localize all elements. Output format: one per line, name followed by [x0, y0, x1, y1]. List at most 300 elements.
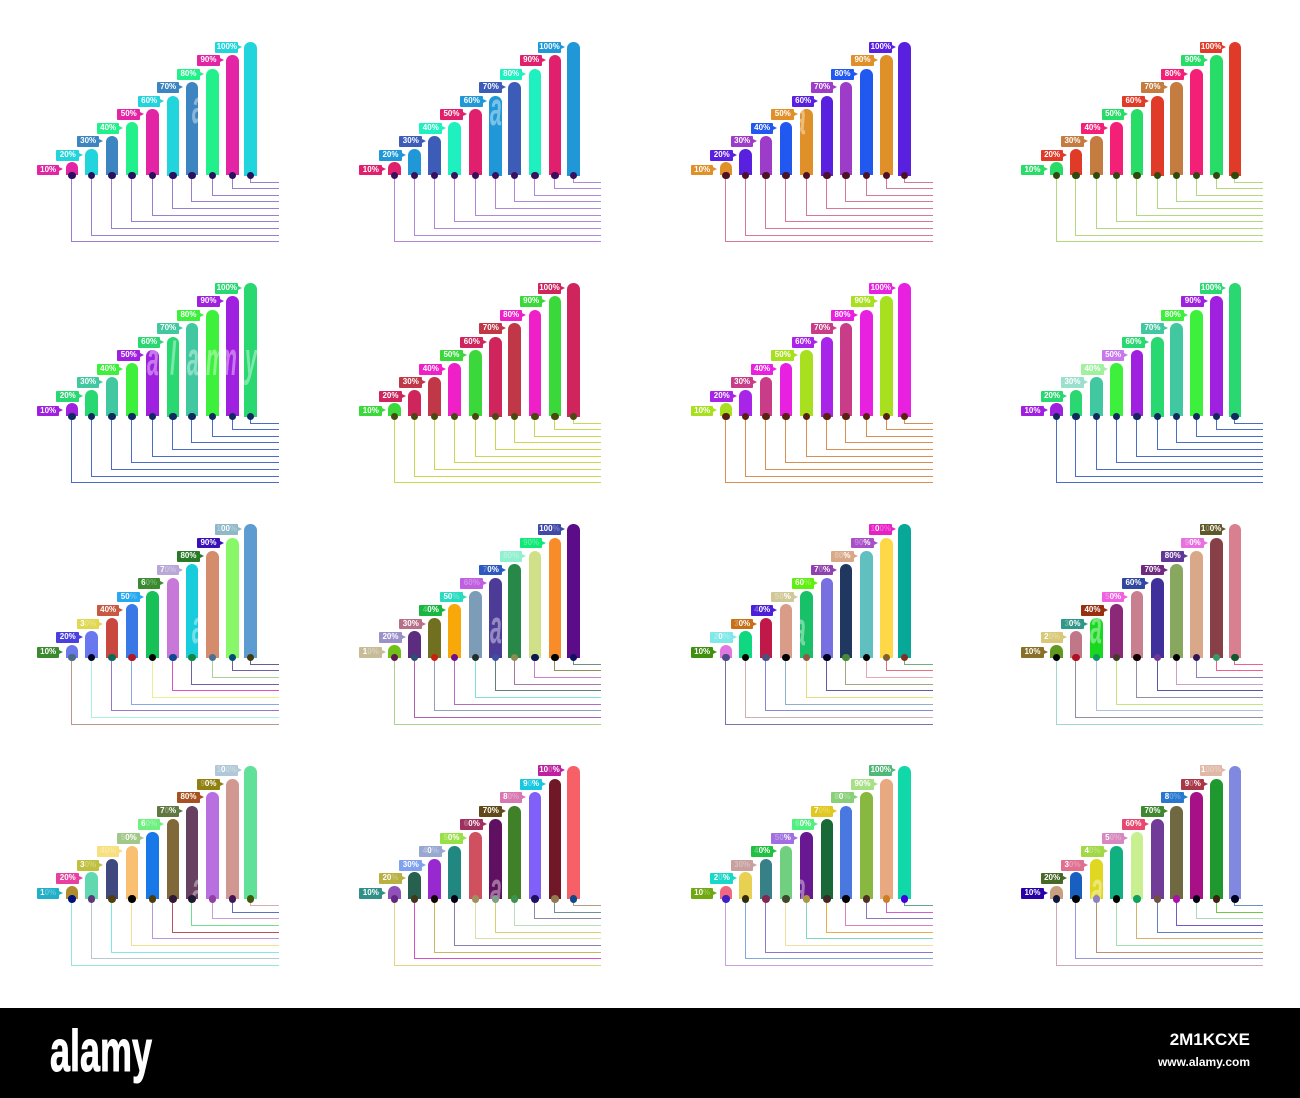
bar 10%: 10%	[694, 165, 710, 174]
bar 60%	[460, 578, 601, 691]
bar 30%: 30%	[1064, 619, 1080, 628]
bar 100%: 100%	[1201, 765, 1221, 774]
bar 10%: 10%	[363, 647, 379, 656]
bar 90%: 90%	[1185, 538, 1201, 547]
bar 60%	[1122, 578, 1263, 691]
bar 30%: 30%	[734, 377, 750, 386]
bar 80%	[500, 792, 601, 919]
bar 80%: 80%	[180, 310, 196, 319]
bar 40%: 40%	[754, 364, 770, 373]
bar 90%	[1181, 538, 1263, 671]
bar 100%	[1200, 283, 1263, 424]
bar 60%	[460, 819, 601, 933]
bar 40%	[419, 363, 601, 463]
bar 100%: 100%	[871, 765, 891, 774]
bar 40%	[97, 846, 279, 946]
bar 60%	[1122, 336, 1263, 450]
bar 70%	[1141, 323, 1263, 443]
bar 70%: 70%	[814, 82, 830, 91]
bar 60%: 60%	[464, 337, 480, 346]
bar 90%: 90%	[1185, 55, 1201, 64]
bar 20%: 20%	[382, 150, 398, 159]
bar 60%: 60%	[464, 96, 480, 105]
bar 10%	[359, 162, 601, 242]
bar 90%: 90%	[854, 296, 870, 305]
bar 70%: 70%	[814, 806, 830, 815]
bar 100%	[215, 524, 279, 665]
bar 90%	[197, 779, 279, 913]
bar 70%: 70%	[160, 82, 176, 91]
bar 20%	[1041, 149, 1263, 236]
bar 30%	[1061, 136, 1263, 229]
bar 100%	[1200, 524, 1263, 665]
bar 20%: 20%	[382, 632, 398, 641]
bar 10%: 10%	[363, 165, 379, 174]
bar 40%: 40%	[423, 846, 439, 855]
bar 30%: 30%	[80, 619, 96, 628]
bar 50%	[440, 350, 601, 457]
bar 80%: 80%	[503, 69, 519, 78]
bar 100%: 100%	[871, 283, 891, 292]
chart 2	[359, 42, 601, 242]
bar 10%	[37, 886, 279, 966]
bar 10%: 10%	[40, 406, 56, 415]
bar 60%	[138, 96, 279, 209]
bar 30%	[77, 377, 279, 470]
bar 20%: 20%	[714, 873, 730, 882]
bar 70%: 70%	[814, 565, 830, 574]
bar 90%	[197, 296, 279, 430]
website: www.alamy.com	[1158, 1055, 1250, 1069]
bar 70%: 70%	[1144, 82, 1160, 91]
bar 80%	[177, 792, 279, 919]
bar 50%	[117, 350, 279, 457]
bar 40%	[419, 122, 601, 222]
bar 90%	[1181, 55, 1263, 189]
bar 30%	[399, 859, 601, 953]
bar 100%	[1200, 766, 1263, 906]
bar 10%: 10%	[40, 165, 56, 174]
bar 80%: 80%	[503, 551, 519, 560]
bar 30%	[77, 859, 279, 953]
bar 30%	[77, 136, 279, 229]
bar 20%: 20%	[1044, 632, 1060, 641]
chart 16	[1021, 766, 1263, 966]
logo: alamy	[50, 1019, 152, 1084]
bar 90%	[520, 538, 601, 671]
bar 50%	[117, 109, 279, 216]
bar 40%	[751, 846, 933, 946]
chart 8	[1021, 283, 1263, 484]
bar 40%: 40%	[100, 846, 116, 855]
bar 90%	[851, 538, 933, 671]
bar 100%	[215, 42, 279, 183]
bar 60%	[460, 336, 601, 450]
bar 60%: 60%	[795, 96, 811, 105]
bar 20%: 20%	[714, 391, 730, 400]
bar 100%	[538, 42, 601, 183]
bar 30%	[77, 618, 279, 711]
bar 20%	[710, 872, 933, 959]
bar 40%: 40%	[754, 846, 770, 855]
chart 6	[359, 283, 601, 484]
bar 70%	[479, 564, 601, 685]
chart 3	[691, 42, 933, 242]
bar 60%	[1122, 819, 1263, 933]
bar 100%: 100%	[871, 42, 891, 51]
bar 20%	[56, 631, 279, 718]
image code: 2M1KCXE	[1170, 1030, 1250, 1049]
bar 70%: 70%	[1144, 806, 1160, 815]
bar 20%: 20%	[60, 632, 76, 641]
bar 40%: 40%	[754, 123, 770, 132]
bar 60%	[792, 819, 933, 933]
bar 80%	[1161, 551, 1263, 678]
bar 60%: 60%	[1125, 819, 1141, 828]
bar 10%	[691, 162, 933, 242]
bar 90%: 90%	[854, 55, 870, 64]
bar 40%: 40%	[100, 123, 116, 132]
bar 40%: 40%	[1084, 846, 1100, 855]
bar 80%: 80%	[1165, 551, 1181, 560]
bar 90%: 90%	[200, 779, 216, 788]
bar 60%: 60%	[795, 819, 811, 828]
chart 1	[37, 42, 279, 242]
bar 10%	[1021, 886, 1263, 966]
bar 50%: 50%	[121, 109, 137, 118]
bar 10%	[691, 403, 933, 483]
bar 60%	[138, 819, 279, 933]
bar 50%: 50%	[121, 350, 137, 359]
bar 80%	[831, 792, 933, 919]
bar 80%: 80%	[834, 69, 850, 78]
bar 10%: 10%	[40, 647, 56, 656]
bar 60%	[138, 336, 279, 450]
bar 40%	[1081, 604, 1263, 705]
bar 30%: 30%	[80, 377, 96, 386]
bar 100%: 100%	[539, 524, 560, 533]
bar 10%	[691, 645, 933, 725]
bar 30%	[731, 859, 933, 953]
bar 30%	[399, 377, 601, 470]
bar 30%: 30%	[403, 136, 419, 145]
bar 50%	[1102, 350, 1263, 457]
bar 70%	[479, 82, 601, 202]
bar 70%: 70%	[160, 565, 176, 574]
bar 90%: 90%	[1185, 779, 1201, 788]
bar 50%	[1102, 109, 1263, 216]
bar 20%	[379, 149, 601, 236]
bar 20%	[1041, 390, 1263, 477]
bar 60%: a	[490, 600, 502, 653]
bar 20%	[1041, 872, 1263, 959]
bar 100%: 100%	[217, 283, 237, 292]
bar 80%	[500, 551, 601, 678]
bar 40%: 40%	[1084, 123, 1100, 132]
bar 30%: 30%	[403, 860, 419, 869]
bar 80%: 80%	[834, 792, 850, 801]
bar 100%: 100%	[871, 524, 891, 533]
bar 30%: 30%	[734, 860, 750, 869]
bar 80%: 80%	[180, 551, 196, 560]
bar 70%	[811, 82, 933, 202]
bar 30%	[399, 618, 601, 711]
bar 30%	[399, 136, 601, 229]
bar 60%: 60%	[464, 819, 480, 828]
bar 90%: 90%	[200, 55, 216, 64]
bar 70%	[1141, 564, 1263, 685]
bar 50%	[1102, 591, 1263, 698]
bar 90%	[520, 296, 601, 430]
bar 60%: 60%	[141, 337, 157, 346]
bar 90%: 90%	[523, 55, 539, 64]
bar 50%	[440, 832, 601, 939]
bar 10%	[37, 162, 279, 242]
bar 20%: 20%	[60, 873, 76, 882]
bar 30%: 30%	[1064, 860, 1080, 869]
bar 70%	[811, 564, 933, 685]
bar 30%: 30%	[80, 136, 96, 145]
bar 90%	[851, 55, 933, 189]
bar 100%	[869, 42, 933, 183]
bar 80%: 80%	[834, 551, 850, 560]
bar 60%	[460, 96, 601, 209]
bar 90%: 90%	[200, 296, 216, 305]
bar 50%	[771, 350, 933, 457]
bar 70%: 70%	[160, 806, 176, 815]
bar 80%	[831, 310, 933, 437]
bar 50%: 50%	[775, 833, 791, 842]
bar 30%	[731, 136, 933, 229]
bar 90%: 90%	[854, 779, 870, 788]
footer band	[0, 1008, 1300, 1098]
chart 10	[359, 524, 601, 725]
bar 60%: 60%	[1125, 337, 1141, 346]
bar 80%	[177, 69, 279, 196]
bar 100%	[869, 766, 933, 906]
bar 30%: 30%	[734, 619, 750, 628]
bar 50%: 50%	[775, 350, 791, 359]
bar 40%	[751, 363, 933, 463]
bar 90%	[1181, 296, 1263, 430]
bar 20%: 20%	[382, 873, 398, 882]
bar 70%: 70%	[483, 565, 499, 574]
bar 100%: 100%	[1201, 42, 1221, 51]
bar 70%: a	[187, 332, 198, 385]
chart 13	[37, 766, 279, 966]
chart 11	[691, 524, 933, 725]
bar 100%	[538, 283, 601, 424]
bar 10%	[1021, 403, 1263, 483]
bar 10%: 10%	[363, 406, 379, 415]
bar 70%	[157, 564, 279, 685]
bar 100%	[869, 283, 933, 424]
bar 80%	[500, 69, 601, 196]
bar 80%	[1161, 69, 1263, 196]
chart 7	[691, 283, 933, 484]
bar 70%: 70%	[483, 806, 499, 815]
bar 40%: 40%	[423, 364, 439, 373]
chart 9	[37, 524, 279, 725]
bar 60%: 60%	[141, 96, 157, 105]
bar 90%: 90%	[523, 779, 539, 788]
bar 90%: 90%	[523, 296, 539, 305]
bar 50%: 50%	[443, 592, 459, 601]
bar 50%: 50%	[1105, 109, 1121, 118]
bar 40%	[751, 604, 933, 705]
bar 90%	[851, 779, 933, 913]
bar 80%	[1161, 792, 1263, 919]
bar 30%	[731, 618, 933, 711]
bar 10%: 10%	[694, 647, 710, 656]
bar 40%	[97, 363, 279, 463]
bar 80%: 80%	[834, 310, 850, 319]
bar 30%	[1061, 859, 1263, 953]
bar 70%: 70%	[483, 323, 499, 332]
bar 10%: 10%	[1024, 406, 1040, 415]
bar 80%: 80%	[1165, 310, 1181, 319]
bar 80%	[831, 551, 933, 678]
bar 50%: 50%	[443, 350, 459, 359]
bar 70%	[479, 806, 601, 926]
bar 20%: 20%	[1044, 873, 1060, 882]
bar 20%: 20%	[60, 391, 76, 400]
bar 40%: 40%	[423, 605, 439, 614]
bar 100%: 100%	[217, 524, 237, 533]
bar 60%	[792, 96, 933, 209]
bar 80%: 80%	[1165, 69, 1181, 78]
bar 70%	[157, 82, 279, 202]
bar 70%: 70%	[1144, 323, 1160, 332]
bar 10%: 10%	[694, 888, 710, 897]
bar 80%	[500, 310, 601, 437]
bar 100%: 100%	[1201, 524, 1221, 533]
bar 20%: 20%	[714, 150, 730, 159]
bar 20%	[379, 872, 601, 959]
bar 10%: 10%	[40, 888, 56, 897]
bar 100%: y	[245, 332, 257, 385]
bar 50%	[1102, 832, 1263, 939]
bar 10%	[37, 645, 279, 725]
bar 70%	[1141, 806, 1263, 926]
bar 90%: 90%	[854, 538, 870, 547]
bar 40%	[419, 846, 601, 946]
bar 90%	[197, 55, 279, 189]
bar 20%	[56, 390, 279, 477]
bar 30%: 30%	[403, 377, 419, 386]
bar 90%	[1181, 779, 1263, 913]
bar 60%: 60%	[795, 578, 811, 587]
bar 10%: 10%	[1024, 647, 1040, 656]
chart 5	[37, 283, 279, 484]
bar 70%: 70%	[814, 323, 830, 332]
bar 100%: 100%	[539, 283, 560, 292]
bar 100%: 100%	[217, 42, 237, 51]
bar 30%: 30%	[1064, 377, 1080, 386]
bar 80%: 80%	[503, 310, 519, 319]
bar 60%: 60%	[141, 819, 157, 828]
bar 20%	[379, 631, 601, 718]
bar 30%: 30%	[80, 860, 96, 869]
bar 40%	[751, 122, 933, 222]
bar 90%	[520, 779, 601, 913]
bar 50%	[771, 832, 933, 939]
bar 50%: 50%	[443, 109, 459, 118]
bar 70%	[1141, 82, 1263, 202]
bar 40%: 40%	[100, 605, 116, 614]
bar 40%	[1081, 846, 1263, 946]
bar 10%: 10%	[1024, 165, 1040, 174]
bar 40%: 40%	[1084, 364, 1100, 373]
bar 20%	[1041, 631, 1263, 718]
bar 70%	[157, 323, 279, 443]
bar 50%	[117, 832, 279, 939]
bar 30%: 30%	[734, 136, 750, 145]
bar 100%	[869, 524, 933, 665]
bar 20%	[379, 390, 601, 477]
bar 20%: 20%	[382, 391, 398, 400]
bar 90%: 90%	[523, 538, 539, 547]
chart 12	[1021, 524, 1263, 725]
bar 20%	[710, 149, 933, 236]
bar 100%: 100%	[1201, 283, 1221, 292]
bar 80%	[177, 551, 279, 678]
bar 60%: 60%	[795, 337, 811, 346]
bar 50%: 50%	[775, 592, 791, 601]
bar 10%	[691, 886, 933, 966]
bar 100%	[215, 766, 279, 906]
bar 50%	[440, 109, 601, 216]
bar 40%: 40%	[100, 364, 116, 373]
bar 10%	[359, 403, 601, 483]
bar 60%	[1122, 96, 1263, 209]
bar 70%: 70%	[160, 323, 176, 332]
bar 40%	[1081, 363, 1263, 463]
bar 40%: 40%	[1084, 605, 1100, 614]
bar 70%: 70%	[1144, 565, 1160, 574]
bar 80%: 80%	[180, 69, 196, 78]
bar 90%	[851, 296, 933, 430]
bar 10%	[359, 886, 601, 966]
chart 4	[1021, 42, 1263, 242]
bar 10%: 10%	[363, 888, 379, 897]
bar 50%	[771, 109, 933, 216]
bar 30%	[731, 377, 933, 470]
bar 70%	[157, 806, 279, 926]
bar 40%	[419, 604, 601, 705]
bar 20%: 20%	[1044, 391, 1060, 400]
bar 90%	[520, 55, 601, 189]
bar 30%	[1061, 377, 1263, 470]
bar 10%: 10%	[694, 406, 710, 415]
bar 10%	[1021, 162, 1263, 242]
bar 20%	[56, 872, 279, 959]
bar 50%: 50%	[121, 833, 137, 842]
bar 90%: 90%	[1185, 296, 1201, 305]
bar 50%	[440, 591, 601, 698]
bar 50%: 50%	[1105, 833, 1121, 842]
bar 60%: 60%	[1125, 96, 1141, 105]
bar 70%: 70%	[483, 82, 499, 91]
chart 14	[359, 766, 601, 966]
bar 100%: 100%	[539, 765, 560, 774]
bar 10%	[1021, 645, 1263, 725]
bar 20%: 20%	[714, 632, 730, 641]
bar 30%: 30%	[1064, 136, 1080, 145]
chart 15	[691, 766, 933, 966]
bar 50%: 50%	[121, 592, 137, 601]
bar 50%: 50%	[1105, 592, 1121, 601]
